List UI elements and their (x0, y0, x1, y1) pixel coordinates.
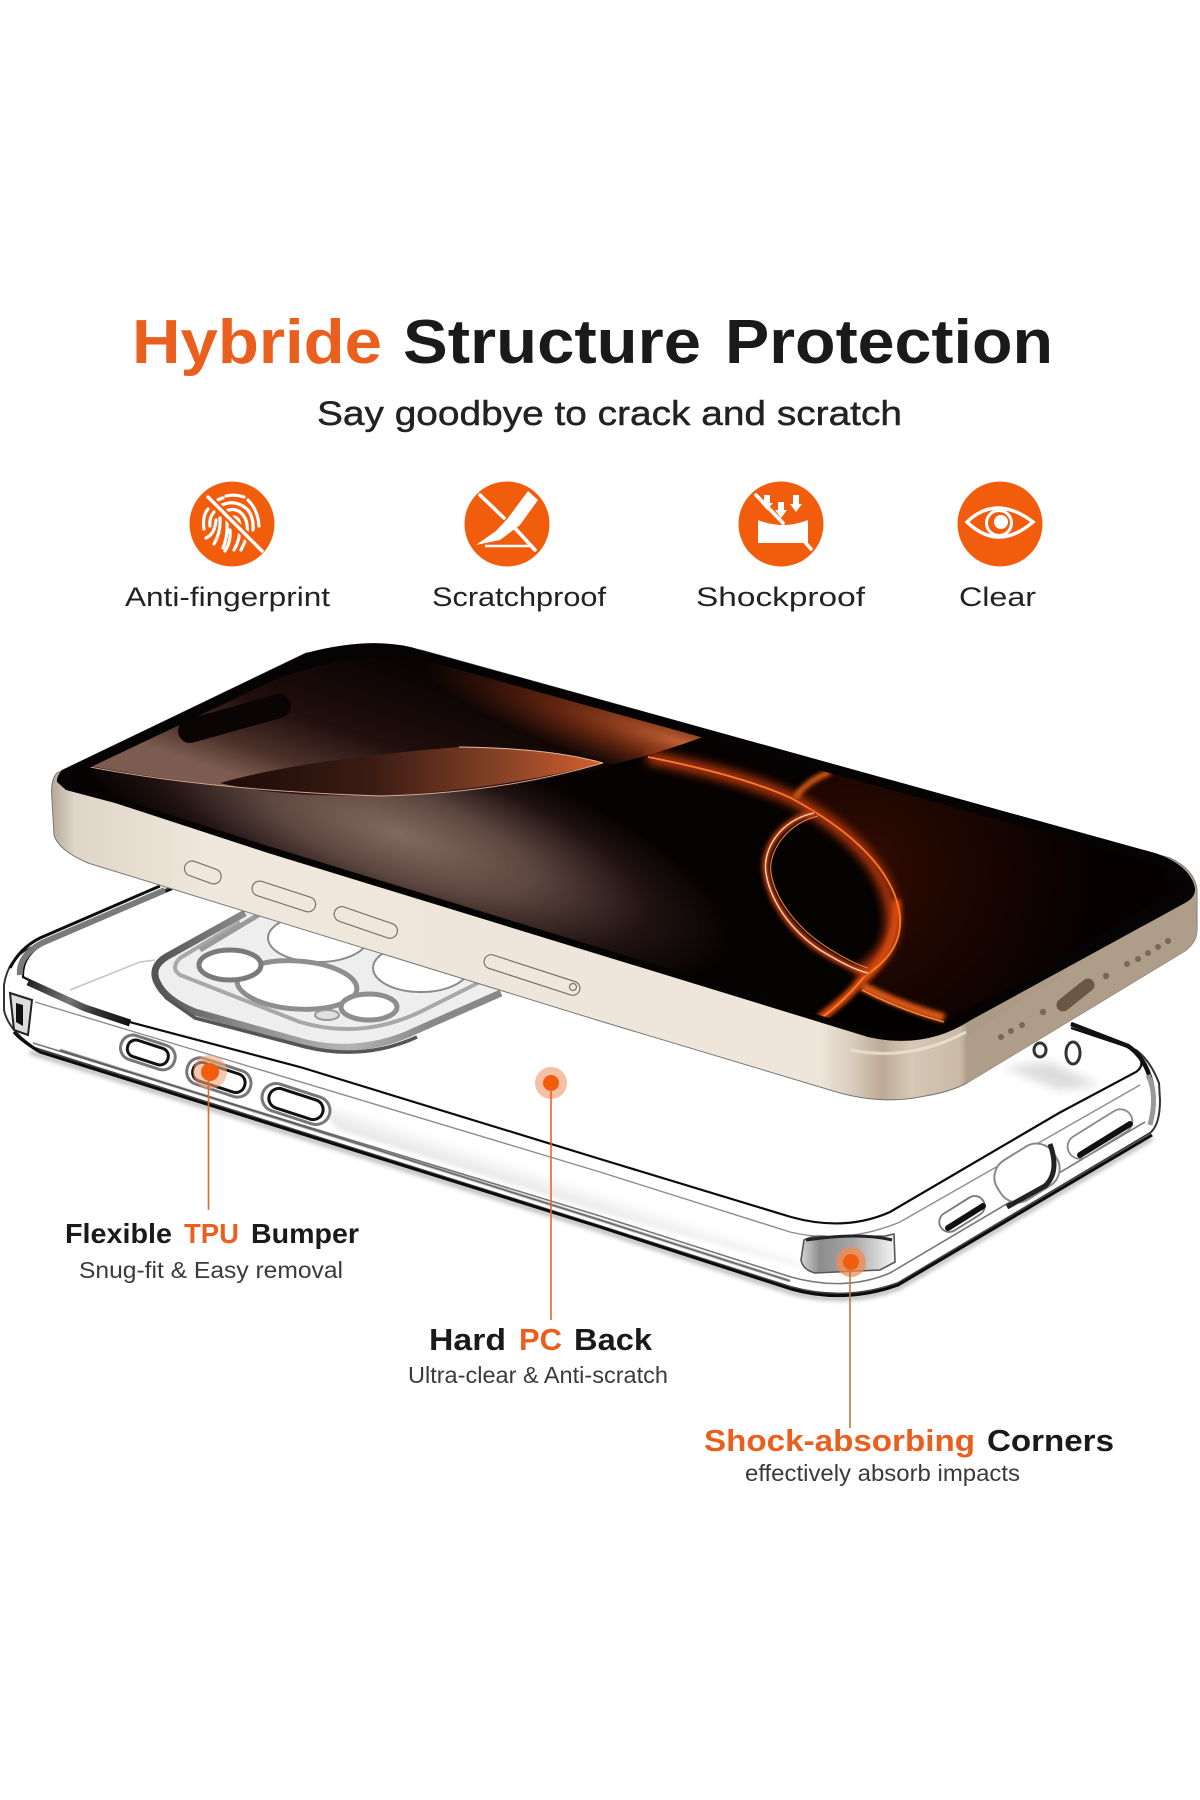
icon labels: Clear (959, 582, 1036, 612)
title: Hybride (132, 308, 382, 377)
icon: anti-fingerprint (190, 482, 274, 566)
wallpaper lower black wedge (818, 990, 944, 1045)
wallpaper orange arcs (648, 757, 944, 1022)
icon: scratchproof (464, 482, 550, 566)
case grey reflection under phone (1002, 1062, 1100, 1090)
phone (50, 640, 1200, 1100)
text: hard PC back (408, 1322, 668, 1388)
text: hard PC back: Hard (429, 1322, 506, 1357)
case chrome left corner (20, 890, 165, 975)
callout: hard PC back marker (535, 1067, 567, 1320)
case inner edge (23, 889, 1141, 1223)
text: flexible TPU bumper: Bumper (251, 1218, 359, 1249)
case lower rim lines (14, 1032, 1152, 1296)
wallpaper leaf (220, 747, 603, 796)
case soft band (300, 1095, 800, 1268)
icon labels: Shockproof (696, 582, 866, 612)
case lower rim halo (30, 1052, 1152, 1299)
icon labels: Anti-fingerprint (125, 582, 331, 612)
lower wallpaper glow (102, 769, 710, 970)
text: shock-absorbing corners (704, 1423, 1114, 1486)
text: flexible TPU bumper: Flexible (65, 1218, 172, 1249)
phone screen bezel (57, 643, 1195, 1041)
text: flexible TPU bumper (65, 1218, 359, 1283)
phone speaker dots (998, 938, 1171, 1040)
clear case (4, 886, 1160, 1299)
case top detail holes (1034, 1042, 1080, 1064)
text: shock-absorbing corners: Shock-absorbing (704, 1423, 975, 1458)
camera surround (155, 890, 501, 1052)
phone wallpaper (90, 661, 1046, 1025)
title: Structure (403, 308, 701, 377)
text: flexible TPU bumper: Snug-fit & Easy removal (79, 1257, 343, 1283)
phone frame (52, 650, 1197, 1100)
text: flexible TPU bumper: TPU (184, 1218, 239, 1249)
text: hard PC back: Back (574, 1322, 653, 1357)
title: Protection (725, 308, 1053, 377)
subtitle: Say goodbye to crack and scratch (317, 395, 902, 433)
phone charging port (1063, 985, 1088, 1005)
title (132, 308, 1053, 377)
phone bottom face (967, 892, 1197, 1083)
icon labels (125, 582, 1036, 612)
text: shock-absorbing corners: effectively absorb impacts (745, 1460, 1020, 1486)
icon: clear (958, 482, 1042, 566)
phone side buttons (182, 859, 582, 997)
case bottom ports (935, 1105, 1137, 1236)
callout: shock-absorbing corners marker (836, 1247, 866, 1428)
callout: flexible TPU bumper marker (193, 1055, 227, 1210)
case body (4, 887, 1160, 1294)
lens openings (268, 914, 368, 962)
phone corner highlight (850, 1032, 966, 1053)
case corner bumper (801, 1234, 895, 1273)
icon labels: Scratchproof (432, 582, 607, 612)
case top-right black rim (1071, 1024, 1152, 1085)
case volume buttons (117, 1032, 334, 1128)
text: hard PC back: Ultra-clear & Anti-scratch (408, 1362, 668, 1388)
text: shock-absorbing corners: Corners (987, 1423, 1114, 1458)
phone camera pill (190, 706, 279, 731)
icon: shockproof (738, 482, 824, 566)
text: hard PC back: PC (519, 1322, 562, 1357)
upper wallpaper band (92, 660, 630, 796)
wallpaper red zone (800, 772, 1051, 1022)
